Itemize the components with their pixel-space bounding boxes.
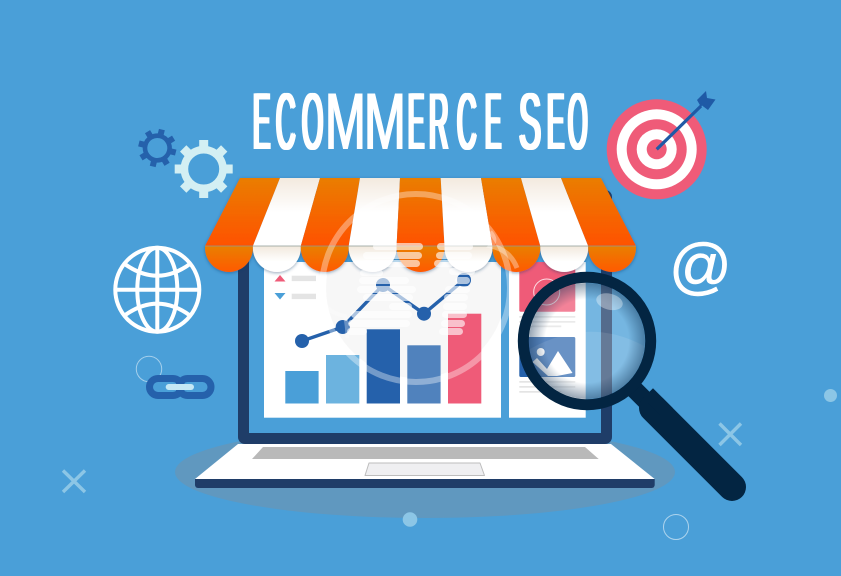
title: C [457, 77, 477, 167]
icon: globe [115, 248, 199, 332]
magnifier rim [523, 277, 651, 405]
title: M [325, 77, 366, 167]
icon: chain link [150, 378, 211, 396]
laptop screen [249, 200, 601, 433]
magnifier lens [529, 283, 645, 399]
legend [274, 275, 316, 300]
title: O [568, 77, 588, 167]
icon: light gear [163, 128, 245, 210]
title: C [276, 77, 296, 167]
trackpad [365, 463, 484, 476]
image placeholder card [519, 337, 575, 377]
keyboard [252, 447, 599, 459]
title: E [408, 77, 424, 167]
laptop front edge [195, 479, 655, 488]
watermark logo [322, 194, 517, 382]
title: E [253, 77, 271, 167]
icon: at sign: @ [669, 232, 732, 301]
bar chart [285, 314, 481, 404]
title: O [302, 77, 323, 167]
laptop base [195, 444, 655, 479]
laptop screen frame [238, 190, 612, 444]
laptop [195, 190, 655, 488]
title: R [429, 77, 449, 167]
icon: target with arrow [607, 91, 716, 199]
magnifier neck [633, 388, 658, 413]
watermark shading [326, 198, 506, 378]
awning scallops [205, 246, 636, 272]
title [253, 77, 588, 167]
panel: analytics chart [264, 262, 501, 418]
magnifier handle [653, 408, 732, 487]
awning roof stripes [205, 178, 636, 246]
title: E [484, 77, 501, 167]
magnifying glass [520, 275, 732, 487]
icon: outline circle left [136, 356, 162, 382]
laptop shadow [175, 426, 675, 518]
icon: dark gear [125, 115, 190, 181]
decoration: dots and rings [403, 389, 837, 540]
text lines [519, 316, 575, 393]
panel: sidebar content [509, 262, 586, 418]
title: S [519, 77, 541, 167]
awning [205, 178, 636, 272]
infographic canvas [62, 91, 837, 540]
line chart [295, 273, 471, 348]
red image card [519, 262, 575, 312]
title: M [364, 77, 406, 167]
decoration: crosses [63, 424, 741, 492]
title: E [547, 77, 565, 167]
